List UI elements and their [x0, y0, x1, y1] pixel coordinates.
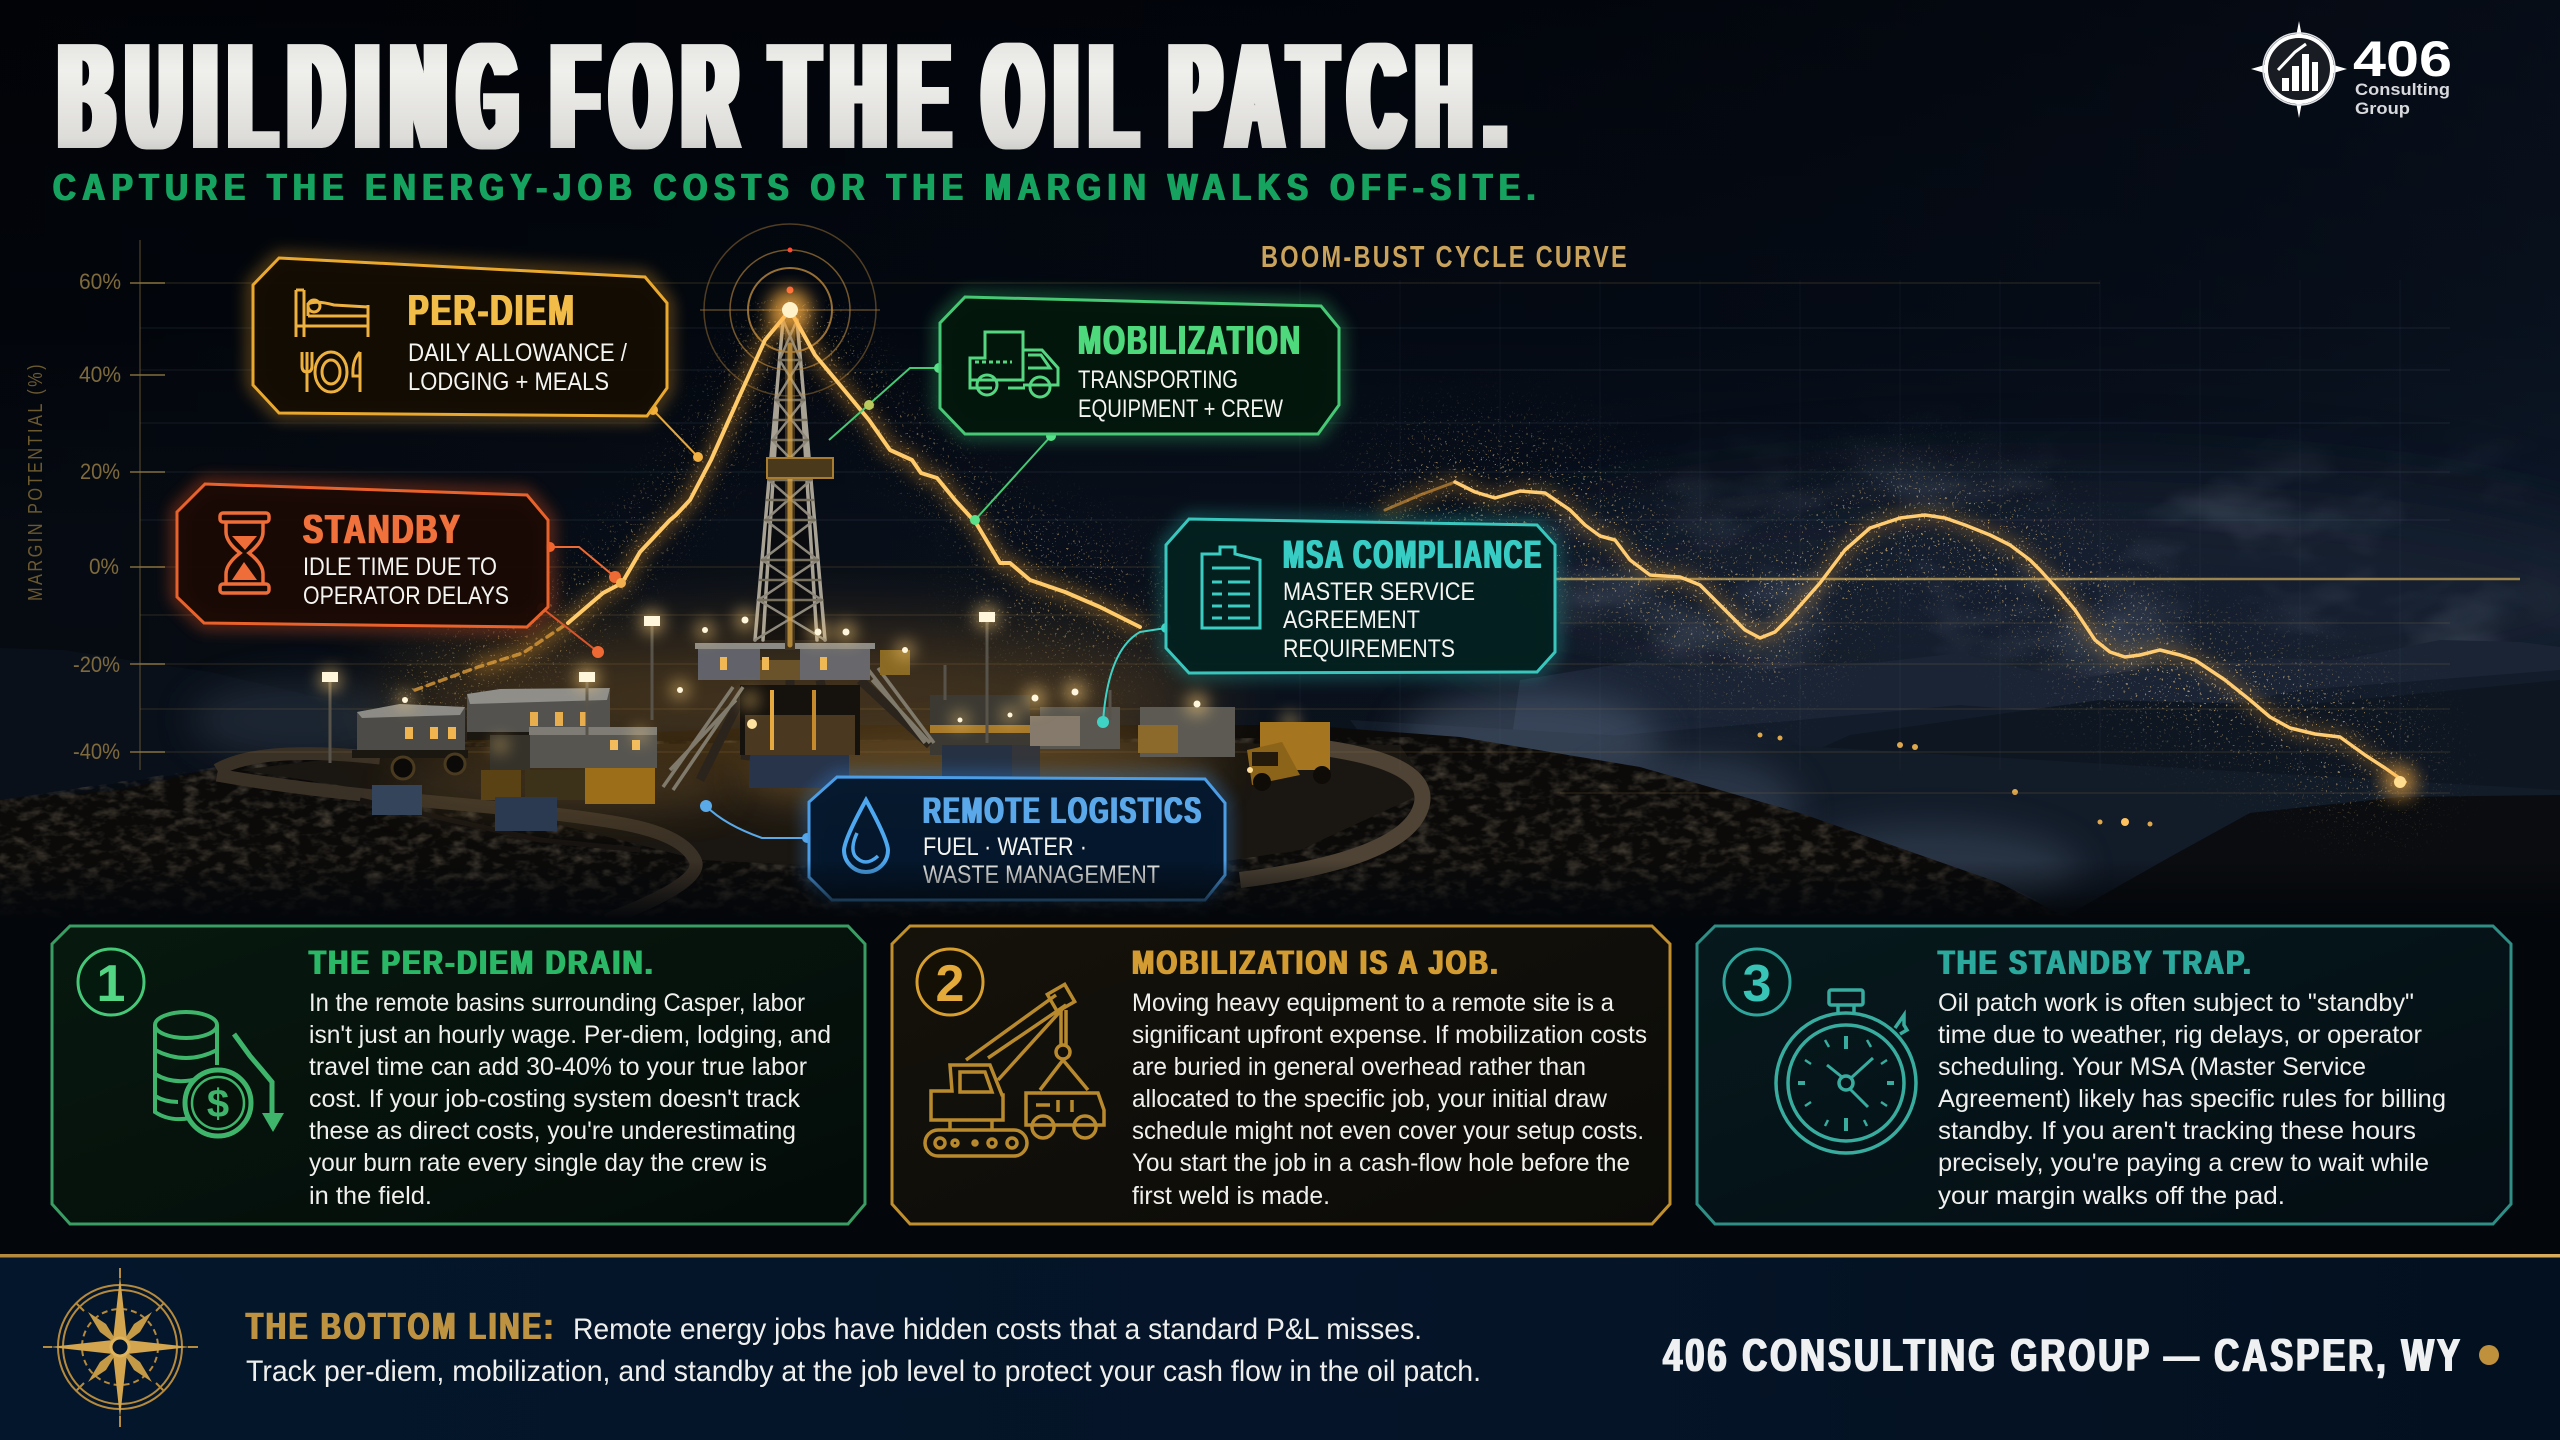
trailer one [352, 704, 468, 779]
text: remote detail: FUEL · WATER · [923, 833, 1087, 861]
y-axis tick labels: 20% [80, 459, 120, 484]
y-axis tick labels: 0% [89, 554, 119, 579]
body text: time due to weather, rig delays, or operator [1938, 1021, 2422, 1049]
footer band [0, 1254, 2560, 1440]
number badge 1 [78, 949, 144, 1015]
text: standby detail [303, 553, 509, 610]
footer gold dot [2479, 1345, 2499, 1365]
y-axis tick labels: -40% [73, 739, 120, 764]
body text: Agreement) likely has specific rules for billing [1938, 1085, 2446, 1113]
text: MSA detail [1283, 578, 1475, 663]
y-axis tick labels: 40% [79, 362, 121, 387]
body text: standby. If you aren't tracking these hours [1938, 1117, 2416, 1145]
body text [1938, 989, 2446, 1210]
heading: THE PER-DIEM DRAIN. [309, 944, 655, 982]
heading: mobilization: MOBILIZATION [1078, 317, 1302, 363]
body text: Moving heavy equipment to a remote site is a [1132, 989, 1614, 1017]
text: mobilization detail [1078, 366, 1283, 423]
body text: these as direct costs, you're underestimating [309, 1117, 796, 1145]
icon: coin stack with falling arrow: $ [207, 1082, 229, 1126]
background sky [162, 0, 2560, 778]
y-axis tick labels: -20% [73, 652, 120, 677]
target rings at the peak [700, 224, 880, 396]
y-axis title: MARGIN POTENTIAL (%) [25, 362, 47, 601]
light glows [319, 605, 1298, 752]
valley mist and lake [190, 680, 2560, 920]
text: per-diem detail: DAILY ALLOWANCE / [408, 339, 627, 367]
icon: plate and cutlery [302, 352, 360, 392]
rig cabins [695, 643, 910, 680]
logo sub-line [2355, 80, 2450, 118]
boom-bust curve [415, 288, 2418, 800]
bottom line message: THE BOTTOM LINE: [246, 1306, 556, 1348]
icon: compass mark [2251, 21, 2347, 118]
body text: Oil patch work is often subject to "standby" [1938, 989, 2414, 1017]
callout: MSA compliance [1166, 519, 1555, 673]
body text: significant upfront expense. If mobilization costs [1132, 1021, 1647, 1049]
trailer two [467, 688, 610, 740]
dumpsters and tanks [372, 745, 1012, 831]
panel: mobilization is a job [892, 926, 1670, 1224]
derrick tower [755, 320, 833, 650]
text: mobilization detail: EQUIPMENT + CREW [1078, 395, 1283, 423]
logo sub-line: Consulting [2355, 80, 2450, 99]
camp equipment rear right [930, 695, 1235, 785]
bottom line message: Track per-diem, mobilization, and standby at the job level to protect your cash flow in the oil patch. [246, 1355, 1481, 1388]
logo wordmark: 406 [2353, 31, 2452, 87]
heading: MOBILIZATION IS A JOB. [1132, 944, 1500, 982]
hillside terrain [0, 725, 2560, 925]
body text: are buried in general overhead rather than [1132, 1053, 1586, 1081]
text: mobilization detail: TRANSPORTING [1078, 366, 1238, 394]
body text: schedule might not even cover your setup costs. [1132, 1117, 1644, 1145]
heading: standby: STANDBY [303, 506, 462, 552]
y-axis tick labels: 60% [79, 269, 121, 294]
text: MSA detail: REQUIREMENTS [1283, 635, 1455, 663]
body text: scheduling. Your MSA (Master Service [1938, 1053, 2366, 1081]
oil rig and camp scene [319, 320, 1331, 831]
chart grid lines [130, 240, 2520, 793]
bottom line message [246, 1306, 1481, 1388]
number badge 2: 2 [936, 955, 964, 1013]
body text [309, 989, 831, 1210]
callout: standby [177, 484, 548, 627]
subtitle: CAPTURE THE ENERGY-JOB COSTS OR THE MARGIN WALKS OFF-SITE. [53, 167, 1542, 209]
logo sub-line: Group [2355, 99, 2410, 118]
y-axis tick labels [73, 269, 121, 764]
icon: water drop [844, 800, 888, 872]
body text: precisely, you're paying a crew to wait while [1938, 1149, 2429, 1177]
light poles [330, 617, 1110, 763]
body text: travel time can add 30-40% to your true labor [309, 1053, 807, 1081]
mountain ranges [0, 640, 2560, 880]
text: remote detail: WASTE MANAGEMENT [923, 861, 1160, 889]
panel: the per-diem drain [52, 926, 865, 1224]
text: standby detail: OPERATOR DELAYS [303, 582, 509, 610]
logo: 406 Consulting Group [2251, 21, 2452, 118]
callout: remote logistics [809, 777, 1225, 900]
callout: per-diem [253, 258, 667, 416]
number badge 3: 3 [1743, 955, 1771, 1013]
lower band background [0, 860, 2560, 1260]
icon: truck [970, 332, 1058, 397]
body text: in the field. [309, 1182, 432, 1210]
chart title: BOOM-BUST CYCLE CURVE [1261, 239, 1629, 274]
text: standby detail: IDLE TIME DUE TO [303, 553, 497, 581]
text: per-diem detail: LODGING + MEALS [408, 368, 609, 396]
substructure legs and floor [663, 660, 934, 790]
body text: In the remote basins surrounding Casper, labor [309, 989, 805, 1017]
icon: hourglass [220, 513, 269, 593]
heading: THE STANDBY TRAP. [1938, 944, 2253, 982]
panel: the standby trap [1697, 926, 2511, 1224]
icon: gold compass rose [43, 1268, 198, 1427]
icon: crane lifting a truck [925, 984, 1104, 1156]
icon: clipboard [1202, 547, 1260, 628]
heading: remote logistics: REMOTE LOGISTICS [923, 790, 1203, 831]
icon: coin stack with falling arrow [155, 1012, 284, 1136]
connector lines [537, 363, 1171, 843]
callout: mobilization [940, 297, 1339, 434]
sparks around curve [380, 300, 2471, 857]
text: MSA detail: AGREEMENT [1283, 606, 1420, 634]
body text: isn't just an hourly wage. Per-diem, lodging, and [309, 1021, 831, 1049]
body text: your margin walks off the pad. [1938, 1182, 2285, 1210]
heading: MSA compliance: MSA COMPLIANCE [1283, 533, 1543, 577]
body text: allocated to the specific job, your initial draw [1132, 1085, 1608, 1113]
body text [1132, 989, 1647, 1210]
icon: bed [296, 290, 368, 337]
number badge 1: 1 [97, 955, 125, 1013]
icon: stopwatch [1776, 990, 1916, 1153]
number badge 2 [917, 949, 983, 1015]
text: MSA detail: MASTER SERVICE [1283, 578, 1475, 606]
yellow service truck [1247, 722, 1331, 791]
body text: cost. If your job-costing system doesn't track [309, 1085, 800, 1113]
text: remote detail [923, 833, 1160, 889]
number badge 3 [1724, 949, 1790, 1015]
trailer three with yellow crates [481, 727, 657, 804]
body text: You start the job in a cash-flow hole before the [1132, 1149, 1630, 1177]
body text: your burn rate every single day the crew is [309, 1149, 767, 1177]
text: per-diem detail [408, 339, 627, 396]
body text: first weld is made. [1132, 1182, 1330, 1210]
bottom line message: Remote energy jobs have hidden costs that a standard P&L misses. [573, 1313, 1422, 1346]
rear glow [380, 630, 1220, 770]
heading: per-diem: PER-DIEM [408, 286, 576, 335]
